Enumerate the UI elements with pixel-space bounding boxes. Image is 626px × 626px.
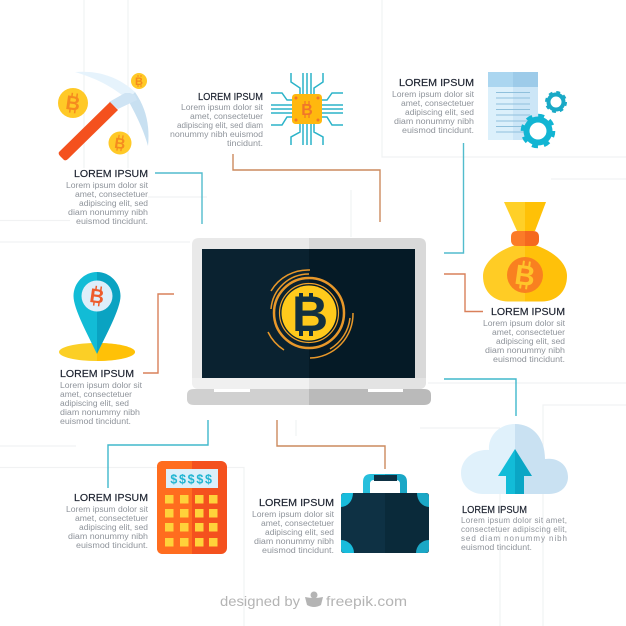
footer credit <box>220 592 407 609</box>
text block: cloud <box>461 505 567 552</box>
icon: calculator <box>157 461 227 554</box>
text block: calculator: adipiscing elit, sed <box>79 523 148 532</box>
text block: mining: Lorem ipsum dolor sit <box>66 181 149 190</box>
icon: money bag: B <box>513 259 537 292</box>
text block: mining: LOREM IPSUM <box>74 169 148 180</box>
icon: calculator: $$$$$ <box>170 472 214 486</box>
text block: document: Lorem ipsum dolor sit <box>392 90 475 99</box>
icon: circuit chip: B <box>301 102 313 119</box>
laptop with bitcoin: B <box>292 286 328 342</box>
text block: briefcase: Lorem ipsum dolor sit <box>252 510 335 519</box>
icon: cloud upload <box>461 424 568 494</box>
connector: chip to laptop <box>233 154 380 222</box>
text block: briefcase: amet, consectetuer <box>261 519 334 528</box>
text block: calculator: Lorem ipsum dolor sit <box>66 505 149 514</box>
text block: location: amet, consectetuer <box>60 390 132 399</box>
icon: pickaxe with coins <box>58 72 148 160</box>
laptop with bitcoin <box>187 238 431 405</box>
text block: chip: tincidunt. <box>227 139 263 148</box>
text block: document: adipiscing elit, sed <box>405 108 474 117</box>
icon: pickaxe with coins: B <box>64 92 82 116</box>
connector: mining to laptop <box>155 173 202 224</box>
text block: money bag: adipiscing elit, sed <box>496 337 565 346</box>
text block: chip <box>170 92 264 148</box>
icon: money bag <box>483 202 567 302</box>
connector: calculator to laptop <box>108 420 208 488</box>
text block: document <box>392 78 475 135</box>
text block: mining: diam nonummy nibh <box>68 208 148 217</box>
icon: circuit chip <box>271 73 343 145</box>
text block: briefcase <box>252 498 335 555</box>
text block: calculator: amet, consectetuer <box>75 514 148 523</box>
text block: briefcase: adipiscing elit, sed <box>265 528 334 537</box>
connector: document to laptop <box>444 143 464 253</box>
text block: money bag: LOREM IPSUM <box>491 307 565 318</box>
text block: chip: amet, consectetuer <box>190 112 263 121</box>
text block: briefcase: euismod tincidunt. <box>262 546 334 555</box>
icon: pickaxe with coins: B <box>113 135 127 153</box>
text block: document: LOREM IPSUM <box>399 78 474 89</box>
text block: calculator <box>66 493 149 550</box>
footer credit: designed by <box>220 593 300 609</box>
text block: calculator: LOREM IPSUM <box>74 493 148 504</box>
text block: mining: euismod tincidunt. <box>76 217 148 226</box>
text block: chip: adipiscing elit, sed diam <box>177 121 263 130</box>
connector: briefcase to laptop <box>277 420 385 469</box>
text block: briefcase: diam nonummy nibh <box>254 537 334 546</box>
text block: location: LOREM IPSUM <box>60 369 134 380</box>
text block: money bag: euismod tincidunt. <box>493 355 565 364</box>
icon: briefcase <box>341 474 429 553</box>
icon: pickaxe with coins: B <box>135 76 143 88</box>
text block: location: diam nonummy nibh <box>60 408 140 417</box>
text block: cloud: sed diam nonummy nibh <box>461 534 567 543</box>
text block: money bag: Lorem ipsum dolor sit <box>483 319 566 328</box>
text block: money bag: diam nonummy nibh <box>485 346 565 355</box>
text block: cloud: consectetuer adipiscing elit, <box>461 525 567 534</box>
text block: calculator: diam nonummy nibh <box>68 532 148 541</box>
icon: document with gears <box>488 72 566 146</box>
text block: document: euismod tincidunt. <box>402 126 474 135</box>
text block: money bag: amet, consectetuer <box>492 328 565 337</box>
icon: location pin <box>59 272 135 361</box>
text block: mining: adipiscing elit, sed <box>79 199 148 208</box>
text block: chip: Lorem ipsum dolor sit <box>181 103 264 112</box>
text block: cloud: LOREM IPSUM <box>462 505 527 516</box>
text block: briefcase: LOREM IPSUM <box>259 498 334 509</box>
text block: document: amet, consectetuer <box>401 99 474 108</box>
text block: cloud: Lorem ipsum dolor sit amet, <box>461 516 567 525</box>
connector: money bag to laptop <box>444 274 483 312</box>
connector: cloud to laptop <box>444 379 516 416</box>
text block: chip: LOREM IPSUM <box>198 92 263 103</box>
text block: cloud: euismod tincidunt. <box>461 543 532 552</box>
text block: location: adipiscing elit, sed <box>60 399 129 408</box>
text block: location: euismod tincidunt. <box>60 417 131 426</box>
text block: money bag <box>483 307 566 364</box>
text block: chip: nonummy nibh euismod <box>170 130 263 139</box>
text block: calculator: euismod tincidunt. <box>76 541 148 550</box>
text block: location: Lorem ipsum dolor sit <box>60 381 143 390</box>
icon: location pin: B <box>88 285 106 309</box>
text block: location <box>60 369 143 426</box>
text block: document: diam nonummy nibh <box>394 117 474 126</box>
connector: location to laptop <box>143 294 174 373</box>
footer credit: freepik.com <box>326 593 407 609</box>
text block: mining <box>66 169 149 226</box>
text block: mining: amet, consectetuer <box>75 190 148 199</box>
